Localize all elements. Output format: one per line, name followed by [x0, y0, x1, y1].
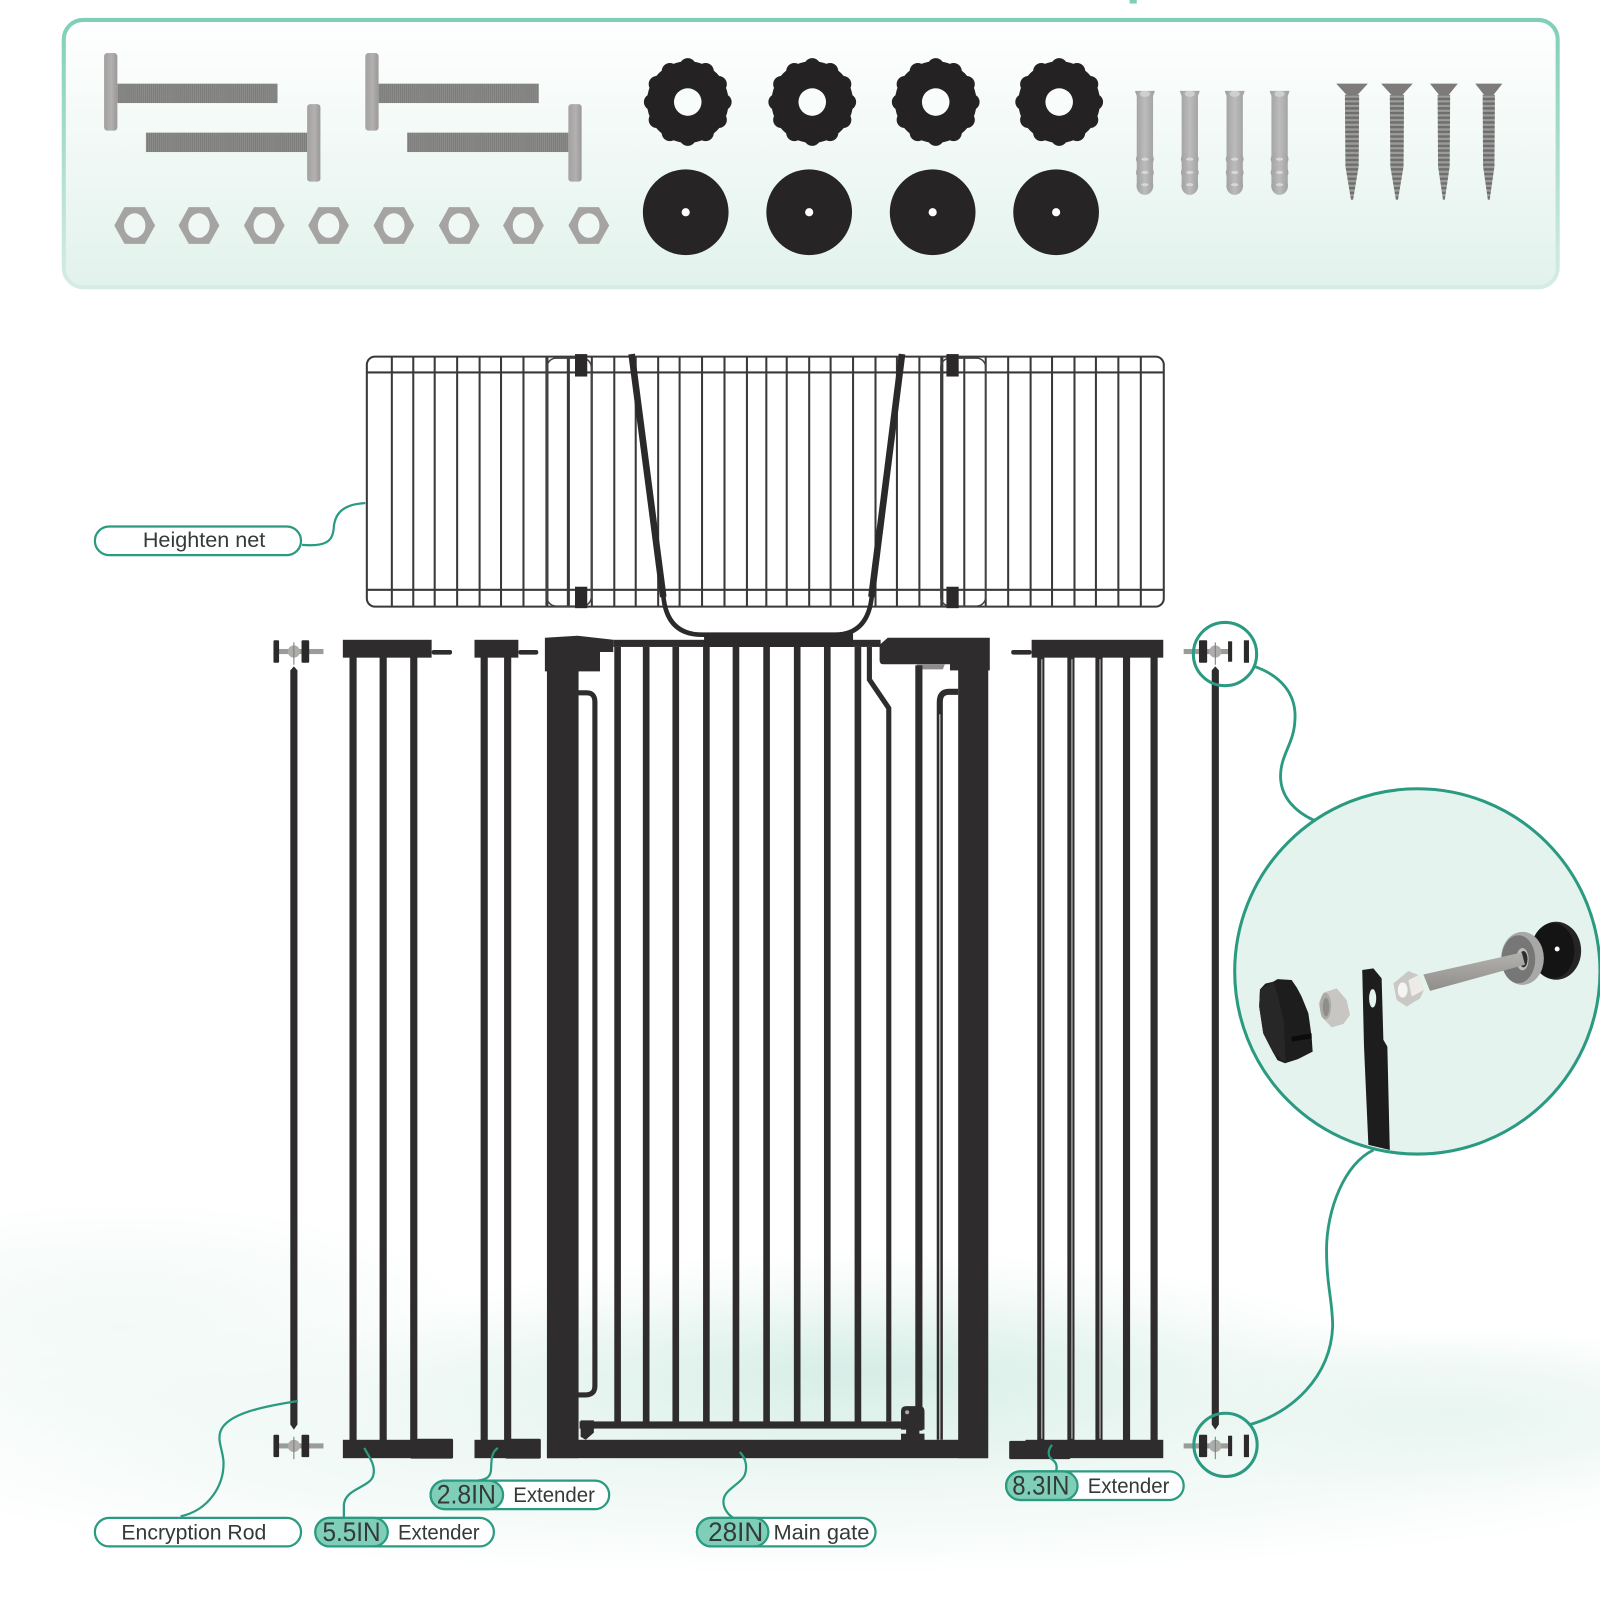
gate handle strap [632, 354, 902, 647]
extender 2.8IN [474, 640, 541, 1459]
connector lines to detail circle [1250, 666, 1373, 1424]
heighten net [367, 354, 1164, 608]
label: 28IN main gate: 28IN [708, 1517, 763, 1547]
encryption rod left [273, 640, 323, 1459]
label: 8.3IN extender [1006, 1445, 1184, 1500]
label: encryption rod: Encryption Rod [121, 1520, 266, 1544]
callout circles on rod hardware [1193, 622, 1257, 1477]
label: 8.3IN extender: 8.3IN [1012, 1470, 1069, 1500]
label: heighten net [95, 503, 365, 555]
encryption rod right [1184, 640, 1249, 1459]
extender 5.5IN [343, 640, 453, 1459]
icon: wall anchors [1135, 91, 1289, 195]
top accent tick [1130, 0, 1137, 4]
icon: bracket end of rod [1362, 968, 1390, 1150]
label: 2.8IN extender: 2.8IN [437, 1480, 496, 1510]
icon: screws [1336, 84, 1502, 200]
icon: T-bolts [104, 53, 582, 182]
panel: hardware accessories [64, 20, 1558, 287]
icon: bolt with pad [1393, 922, 1581, 1007]
icon: hex nuts [114, 207, 609, 244]
icon: scalloped knobs [644, 58, 1103, 146]
label: 2.8IN extender: Extender [513, 1483, 595, 1507]
label: 5.5IN extender [315, 1448, 494, 1547]
label: 8.3IN extender: Extender [1088, 1474, 1169, 1498]
label: 5.5IN extender: 5.5IN [322, 1517, 381, 1547]
detail circle: bolt assembly [1235, 789, 1600, 1154]
label: 5.5IN extender: Extender [398, 1520, 480, 1544]
icon: exploded knob [1259, 979, 1313, 1063]
icon: exploded nut [1319, 988, 1350, 1027]
label: encryption rod [95, 1401, 301, 1546]
label: 28IN main gate: Main gate [773, 1520, 869, 1544]
icon: rubber pads [643, 169, 1099, 255]
main gate [545, 636, 990, 1458]
extender 8.3IN [1009, 640, 1163, 1459]
label: 2.8IN extender [431, 1448, 609, 1510]
label: heighten net: Heighten net [143, 528, 265, 552]
label: 28IN main gate [697, 1452, 876, 1547]
